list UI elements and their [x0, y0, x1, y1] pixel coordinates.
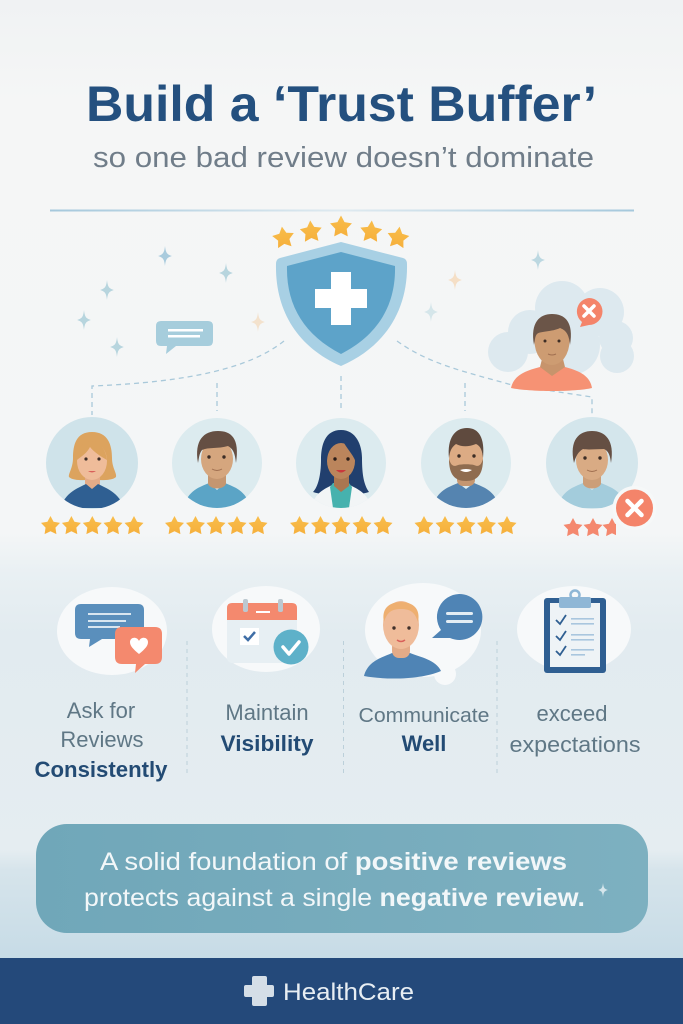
cross — [315, 272, 367, 325]
cloud — [488, 281, 634, 375]
label: communicate well: Well — [402, 731, 446, 756]
shield — [276, 242, 407, 366]
avatar 5: man with low rating — [546, 417, 656, 536]
label: ask for reviews consistently: Consistently — [34, 757, 168, 782]
label: exceed expectations: exceed — [537, 701, 607, 726]
label: ask for reviews consistently: Reviews — [60, 727, 144, 752]
title: Build a ‘Trust Buffer’ — [86, 76, 597, 132]
avatar 1: woman, five stars — [41, 417, 144, 534]
label: exceed expectations — [510, 701, 640, 757]
label: maintain visibility: Visibility — [220, 731, 314, 756]
label: ask for reviews consistently: Ask for — [67, 698, 135, 723]
label: exceed expectations: expectations — [510, 732, 640, 757]
stars — [41, 516, 144, 534]
avatar 2: man, five stars — [165, 418, 268, 534]
stars — [414, 516, 516, 534]
gold stars — [271, 216, 410, 249]
icon: communicate well — [364, 583, 482, 685]
label: maintain visibility — [220, 700, 314, 756]
person — [511, 367, 592, 391]
callout — [36, 824, 648, 933]
label: communicate well: Communicate — [358, 705, 490, 727]
negative reviewer in cloud — [488, 281, 634, 391]
callout: A solid foundation of positive reviews — [100, 848, 567, 876]
dashed connectors — [92, 341, 592, 415]
brand name: HealthCare — [283, 979, 414, 1006]
icon: cross — [244, 976, 274, 1006]
red x badge — [612, 486, 656, 530]
red stars — [564, 518, 622, 536]
stars — [290, 516, 392, 534]
red x bubble — [577, 298, 602, 327]
subtitle: so one bad review doesn’t dominate — [93, 142, 594, 174]
icon: ask for reviews — [57, 587, 167, 675]
icon: shield with stars — [271, 216, 410, 366]
callout: protects against a single negative review. — [84, 884, 585, 912]
label: maintain visibility: Maintain — [225, 700, 309, 725]
label: communicate well — [358, 705, 490, 756]
icon: maintain visibility — [212, 586, 320, 672]
footer — [0, 958, 683, 1024]
stars — [165, 516, 268, 534]
avatar 3: doctor, five stars — [290, 418, 392, 534]
icon: chat bubble — [156, 321, 213, 354]
sparkles — [77, 246, 545, 357]
icon: exceed expectations — [517, 586, 631, 673]
avatar 4: bearded man, five stars — [414, 418, 516, 534]
label: ask for reviews consistently — [34, 698, 168, 782]
